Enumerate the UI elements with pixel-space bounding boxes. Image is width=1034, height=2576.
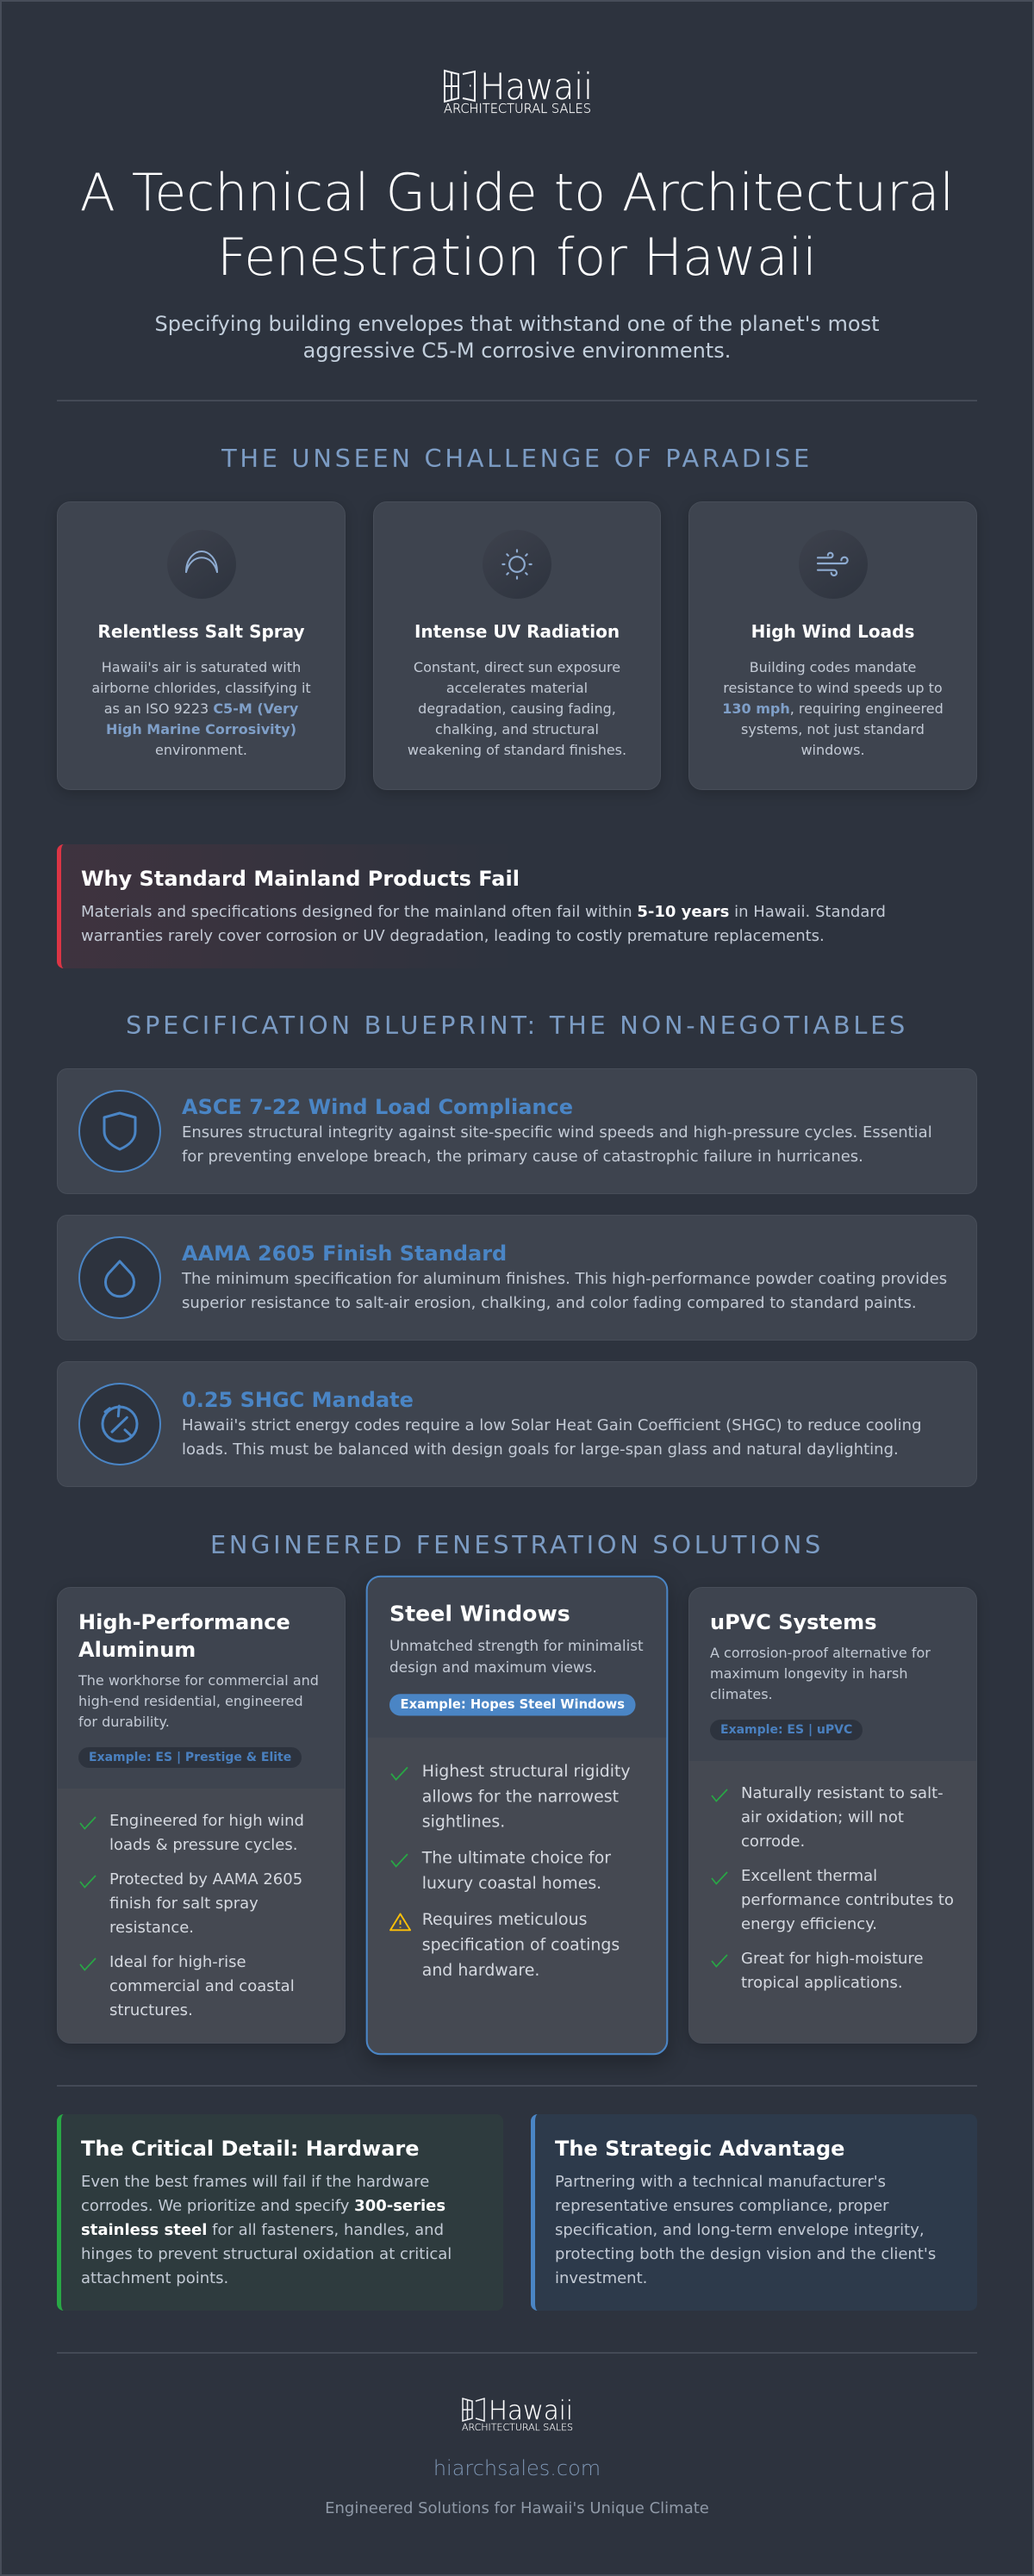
aluminum header: Example: ES | Prestige & Elite — [89, 1751, 291, 1764]
aluminum list: commercial and coastal — [109, 1977, 295, 1995]
uPVC list: corrode. — [741, 1832, 805, 1851]
panel: UV radiation: weakening of standard finishes. — [408, 742, 626, 758]
hardware text: stainless steel for all fasteners, handles, and — [81, 2221, 444, 2238]
aluminum list: Protected by AAMA 2605 — [109, 1870, 302, 1888]
callout: why mainland products fail — [57, 844, 977, 968]
panel: strategic advantage — [531, 2114, 977, 2311]
steel list: Highest structural rigidity — [422, 1762, 631, 1781]
panel: wind loads: windows. — [800, 742, 865, 758]
aluminum list: structures. — [109, 2001, 193, 2019]
callout text: Materials and specifications designed for the mainland often fail within 5-10 years in Hawaii. Standard — [81, 903, 886, 920]
panel: uPVC — [688, 1587, 977, 2044]
uPVC header — [689, 1588, 976, 1761]
panel: aluminum — [57, 1587, 346, 2044]
uPVC list: energy efficiency. — [741, 1915, 877, 1933]
aluminum header: high-end residential, engineered — [78, 1693, 303, 1709]
aluminum header: Aluminum — [78, 1638, 196, 1662]
steel list: luxury coastal homes. — [422, 1874, 601, 1893]
strategic text: Partnering with a technical manufacturer's — [555, 2173, 886, 2190]
subtitle: Specifying building envelopes that withstand one of the planet's most — [154, 312, 879, 336]
panel: wind loads: systems, not just standard — [741, 721, 925, 737]
title: Fenestration for Hawaii — [217, 227, 817, 288]
panel: steel windows — [366, 1576, 668, 2055]
icon: shield — [78, 1090, 161, 1173]
panel: ASCE wind load: ASCE 7-22 Wind Load Compliance — [182, 1094, 573, 1118]
uPVC list: Naturally resistant to salt- — [741, 1784, 944, 1802]
panel: wind loads — [688, 501, 977, 790]
panel: hardware — [57, 2114, 503, 2311]
steel list — [389, 1762, 631, 1980]
hardware text: hinges to prevent structural oxidation at critical — [81, 2245, 452, 2262]
strategic text: protecting both the design vision and the client's — [555, 2245, 936, 2262]
strategic text: specification, and long-term envelope integrity, — [555, 2221, 925, 2238]
callout text — [81, 903, 886, 944]
panel: wind loads: High Wind Loads — [751, 621, 914, 642]
panel: SHGC mandate: loads. This must be balanced with design goals for large-span glass and natural daylighting. — [182, 1440, 899, 1459]
panel: salt spray: airborne chlorides, classifying it — [91, 680, 311, 696]
hardware heading: The Critical Detail: Hardware — [81, 2137, 420, 2161]
aluminum list: loads & pressure cycles. — [109, 1836, 297, 1854]
panel: AAMA finish: AAMA 2605 Finish Standard — [182, 1241, 507, 1265]
hardware text: attachment points. — [81, 2269, 228, 2287]
callout heading: Why Standard Mainland Products Fail — [81, 867, 520, 891]
panel: ASCE wind load: for preventing envelope breach, the primary cause of catastrophic failure in hurricanes. — [182, 1148, 863, 1166]
aluminum header: for durability. — [78, 1714, 170, 1730]
footer logo: Hawaii — [489, 2396, 573, 2426]
footer logo — [462, 2396, 573, 2433]
panel: AAMA finish — [57, 1215, 977, 1341]
panel: salt spray: High Marine Corrosivity) — [106, 721, 296, 737]
hardware text: Even the best frames will fail if the hardware — [81, 2173, 429, 2190]
title — [80, 162, 954, 288]
panel: SHGC mandate: 0.25 SHGC Mandate — [182, 1387, 414, 1411]
steel header: design and maximum views. — [389, 1658, 597, 1676]
footer tagline: Engineered Solutions for Hawaii's Unique Climate — [325, 2499, 709, 2517]
title: A Technical Guide to Architectural — [80, 162, 954, 222]
panel: salt spray: environment. — [155, 742, 247, 758]
aluminum list: finish for salt spray — [109, 1895, 258, 1913]
aluminum list: Ideal for high-rise — [109, 1953, 246, 1971]
uPVC header: climates. — [710, 1686, 773, 1702]
icon: sun — [483, 530, 551, 599]
steel list: The ultimate choice for — [422, 1849, 611, 1868]
subtitle — [154, 312, 879, 363]
panel: wind loads: Building codes mandate — [750, 659, 916, 675]
footer logo: ARCHITECTURAL SALES — [462, 2422, 573, 2433]
uPVC list: performance contributes to — [741, 1891, 954, 1909]
aluminum list — [79, 1812, 304, 2019]
uPVC list: Great for high-moisture — [741, 1950, 924, 1968]
panel: salt spray: as an ISO 9223 C5-M (Very — [104, 700, 298, 717]
icon: salt spray — [167, 530, 236, 599]
panel: AAMA finish: The minimum specification for aluminum finishes. This high-performance powder coating provides — [182, 1270, 947, 1288]
aluminum header: The workhorse for commercial and — [78, 1672, 319, 1689]
panel: salt spray: Hawaii's air is saturated with — [102, 659, 301, 675]
panel: UV radiation: degradation, causing fading, — [418, 700, 616, 717]
aluminum header — [58, 1588, 345, 1789]
callout text: warranties rarely cover corrosion or UV degradation, leading to costly premature replacements. — [81, 927, 825, 944]
strategic text: investment. — [555, 2269, 647, 2287]
panel: ASCE wind load — [57, 1068, 977, 1194]
heading: engineered solutions: ENGINEERED FENESTRATION SOLUTIONS — [210, 1530, 824, 1559]
uPVC header: uPVC Systems — [710, 1610, 876, 1634]
panel: UV radiation: accelerates material — [446, 680, 588, 696]
steel list: sightlines. — [422, 1813, 505, 1832]
steel header: Unmatched strength for minimalist — [389, 1637, 644, 1654]
strategic text — [555, 2173, 936, 2287]
subtitle: aggressive C5-M corrosive environments. — [303, 339, 731, 363]
panel: UV radiation: chalking, and structural — [435, 721, 599, 737]
panel: SHGC mandate: Hawaii's strict energy codes require a low Solar Heat Gain Coefficient (SHGC) to reduce cooling — [182, 1416, 922, 1434]
uPVC list: tropical applications. — [741, 1974, 903, 1992]
footer website: hiarchsales.com — [433, 2456, 601, 2480]
panel: ASCE wind load: Ensures structural integrity against site-specific wind speeds and high-pressure cycles. Essential — [182, 1123, 932, 1142]
panel: SHGC mandate — [57, 1361, 977, 1487]
panel: salt spray — [57, 501, 346, 790]
steel list: specification of coatings — [422, 1936, 620, 1955]
steel header — [368, 1577, 666, 1738]
heading: specification blueprint: SPECIFICATION BLUEPRINT: THE NON-NEGOTIABLES — [126, 1011, 908, 1040]
steel list: and hardware. — [422, 1961, 539, 1980]
uPVC list: air oxidation; will not — [741, 1808, 904, 1826]
strategic heading: The Strategic Advantage — [555, 2137, 844, 2161]
hardware text — [81, 2173, 452, 2287]
uPVC header: Example: ES | uPVC — [720, 1723, 852, 1737]
panel: AAMA finish: superior resistance to salt-air erosion, chalking, and color fading compared to standard paints. — [182, 1294, 917, 1312]
aluminum list: Engineered for high wind — [109, 1812, 304, 1830]
panel: UV radiation — [373, 501, 661, 790]
panel: wind loads: resistance to wind speeds up to — [723, 680, 943, 696]
steel list: allows for the narrowest — [422, 1787, 619, 1806]
logo: Hawaii Architectural Sales — [444, 65, 593, 116]
uPVC header: A corrosion-proof alternative for — [710, 1645, 931, 1661]
hardware text: corrodes. We prioritize and specify 300-series — [81, 2197, 445, 2214]
icon: wind — [798, 530, 867, 599]
uPVC list: Excellent thermal — [741, 1867, 877, 1885]
panel: wind loads: 130 mph, requiring engineered — [722, 700, 944, 717]
icon: water drop — [78, 1236, 161, 1319]
uPVC list — [712, 1784, 954, 1992]
uPVC header: maximum longevity in harsh — [710, 1665, 908, 1682]
logo: Hawaii Architectural Sales: ARCHITECTURAL SALES — [444, 101, 591, 116]
steel header: Example: Hopes Steel Windows — [401, 1697, 625, 1712]
heading: the unseen challenge: THE UNSEEN CHALLENGE OF PARADISE — [221, 444, 813, 473]
strategic text: representative ensures compliance, proper — [555, 2197, 889, 2214]
aluminum header: High-Performance — [78, 1610, 290, 1634]
icon: gauge — [78, 1383, 161, 1465]
panel: UV radiation: Intense UV Radiation — [414, 621, 620, 642]
steel list: Requires meticulous — [422, 1910, 587, 1929]
steel header: Steel Windows — [389, 1601, 570, 1627]
panel: salt spray: Relentless Salt Spray — [97, 621, 305, 642]
aluminum list: resistance. — [109, 1919, 194, 1937]
panel: UV radiation: Constant, direct sun exposure — [414, 659, 620, 675]
